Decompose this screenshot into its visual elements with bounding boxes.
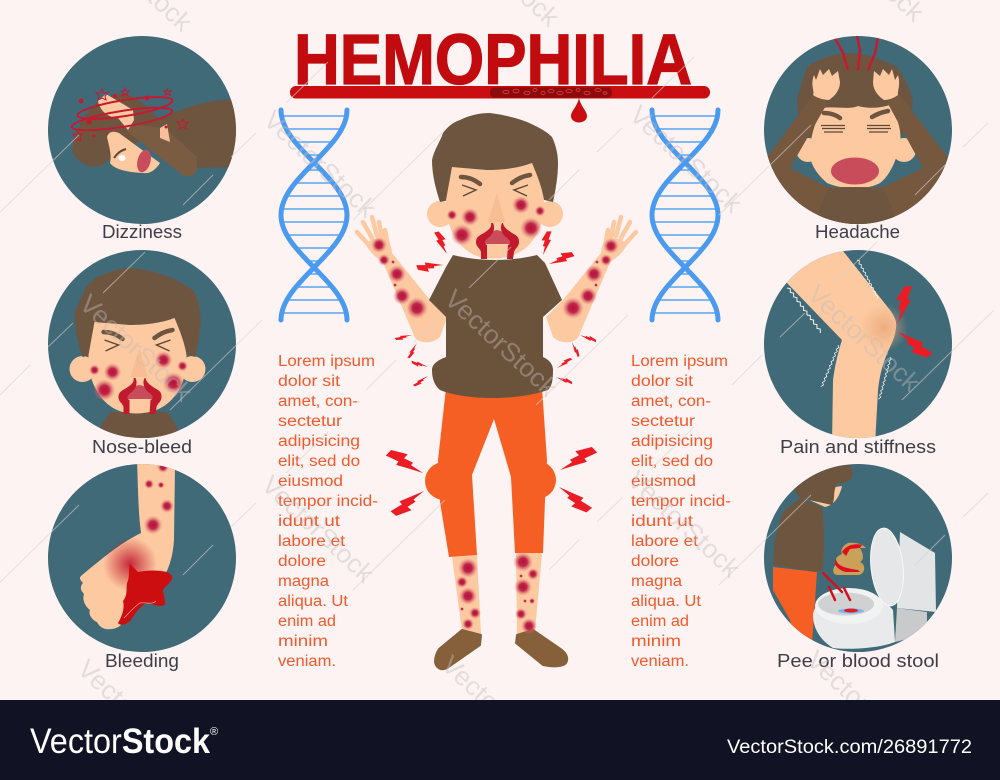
footer bar <box>0 700 1000 780</box>
text block left: enim ad <box>278 613 336 630</box>
watermark overlay: VectorStock <box>439 283 564 403</box>
text block right: adipisicing <box>631 433 713 450</box>
text block right: aliqua. Ut <box>631 593 702 610</box>
text block right: elit, sed do <box>631 453 713 470</box>
text block left <box>278 353 378 670</box>
label: bleeding: Bleeding <box>105 651 179 671</box>
text block left: dolor sit <box>278 373 341 390</box>
shirt <box>429 255 562 398</box>
text block left: sectetur <box>278 413 342 430</box>
text block right: tempor incid- <box>631 493 731 510</box>
label: pain and stiffness: Pain and stiffness <box>780 437 936 457</box>
head <box>427 113 563 259</box>
pain bolts around figure <box>384 229 599 519</box>
panel: nose-bleed <box>48 250 236 445</box>
DNA right <box>652 110 718 320</box>
text block left: magna <box>278 573 329 590</box>
watermark overlay: VectorStock <box>74 288 199 408</box>
legs <box>452 553 542 634</box>
label: nose-bleed: Nose-bleed <box>92 437 192 457</box>
label: headache: Headache <box>815 222 900 242</box>
watermark overlay: VectorStock <box>436 649 561 769</box>
footer registered mark: ® <box>210 726 218 738</box>
text block left: Lorem ipsum <box>278 353 375 370</box>
text block right: magna <box>631 573 682 590</box>
text block right: Lorem ipsum <box>631 353 728 370</box>
label: pee or blood stool: Pee or blood stool <box>777 651 939 671</box>
watermark overlay: VectorStock <box>258 104 383 224</box>
title: HEMOPHILIA <box>294 21 692 100</box>
watermark overlay: VectorStock <box>256 469 381 589</box>
left arm <box>357 217 447 342</box>
text block left: minim <box>278 633 328 650</box>
text block right: idunt ut <box>631 513 694 530</box>
panel: headache <box>764 36 952 230</box>
text block right: enim ad <box>631 613 689 630</box>
text block left: dolore <box>278 553 326 570</box>
text block right: dolor sit <box>631 373 694 390</box>
panel: pee or blood stool <box>764 464 952 652</box>
text block right: amet, con- <box>631 393 711 410</box>
text block right: labore et <box>631 533 699 550</box>
text block left: veniam. <box>278 653 336 670</box>
footer image id: VectorStock.com/26891772 <box>727 737 972 758</box>
blood drop <box>571 98 587 122</box>
text block right <box>631 353 731 670</box>
footer logo: VectorStock <box>30 722 210 761</box>
panel: pain and stiffness <box>764 240 952 445</box>
text block left: idunt ut <box>278 513 341 530</box>
text block right: minim <box>631 633 681 650</box>
title blood vessel bar <box>290 86 710 98</box>
text block left: aliqua. Ut <box>278 593 349 610</box>
trousers <box>425 388 556 557</box>
right arm <box>546 217 636 342</box>
text block right: eiusmod <box>631 473 696 490</box>
text block left: tempor incid- <box>278 493 378 510</box>
watermark overlay: VectorStock <box>801 644 926 764</box>
text block right: sectetur <box>631 413 695 430</box>
text block left: adipisicing <box>278 433 360 450</box>
panel: bleeding <box>48 460 236 652</box>
central figure <box>357 113 636 669</box>
text block right: veniam. <box>631 653 689 670</box>
watermark overlay: VectorStock <box>622 464 747 584</box>
shoes <box>435 630 567 669</box>
text block left: elit, sed do <box>278 453 360 470</box>
text block right: dolore <box>631 553 679 570</box>
DNA left <box>281 110 347 320</box>
text block left: amet, con- <box>278 393 358 410</box>
watermark overlay: VectorStock <box>624 99 749 219</box>
watermark overlay: VectorStock <box>72 653 197 773</box>
panel: dizziness <box>48 36 240 224</box>
text block left: eiusmod <box>278 473 343 490</box>
skin spots <box>371 237 619 634</box>
watermark overlay: VectorStock <box>802 278 927 398</box>
label: dizziness: Dizziness <box>102 222 182 242</box>
text block left: labore et <box>278 533 346 550</box>
